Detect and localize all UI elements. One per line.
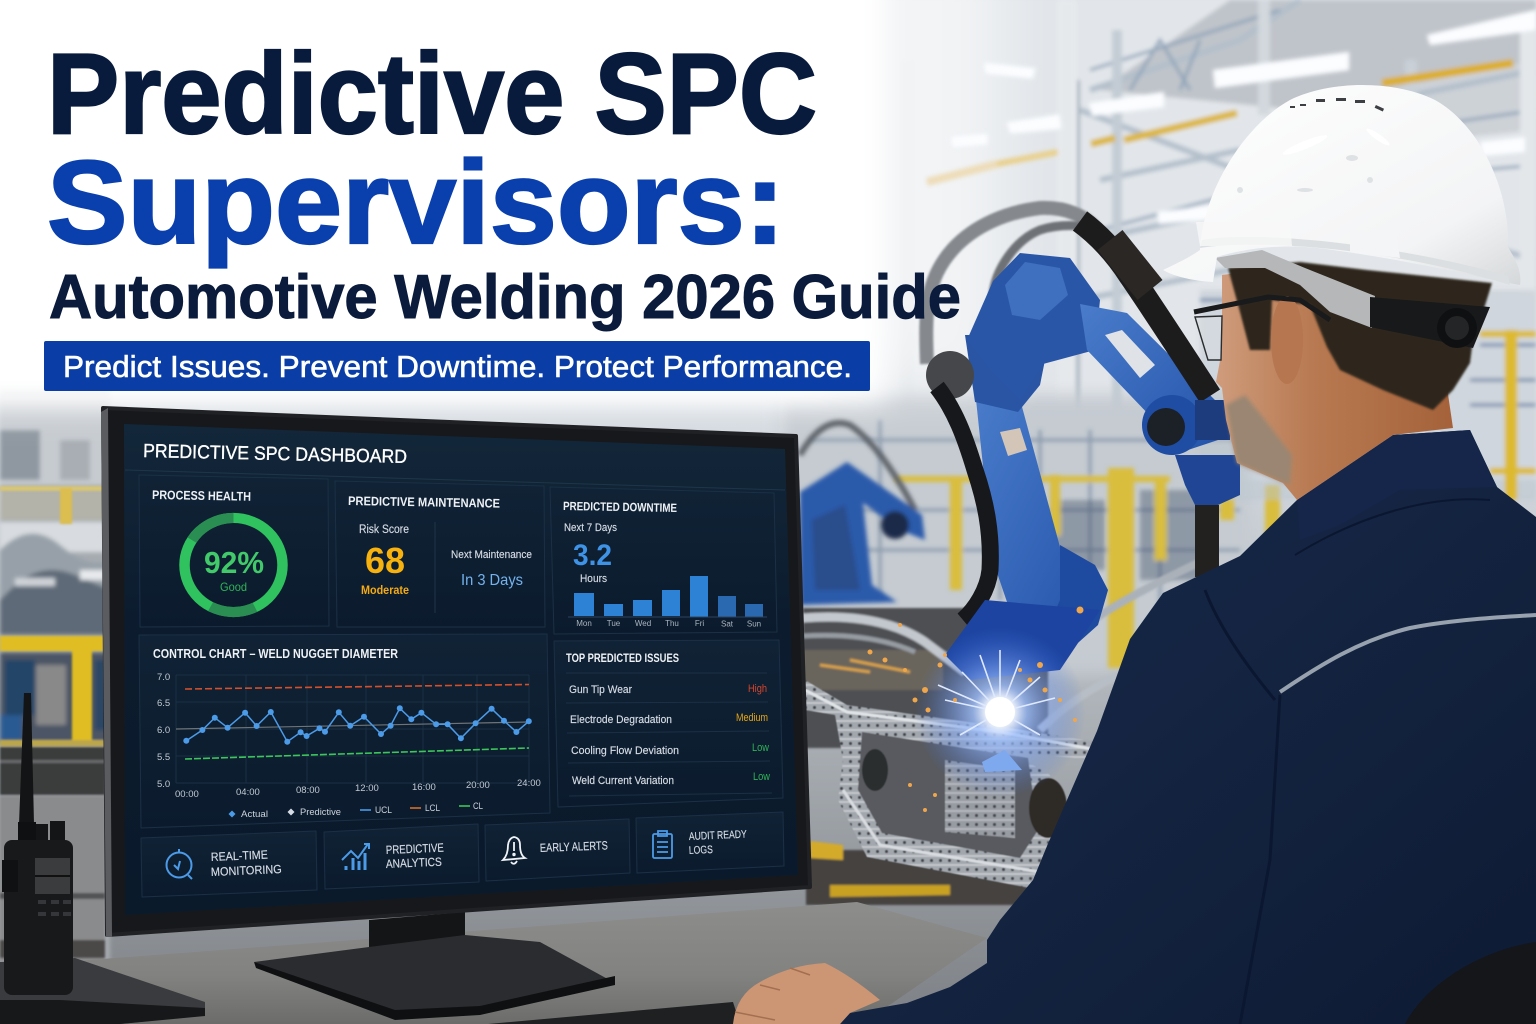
monitor bbox=[101, 408, 810, 937]
next maintenance: In 3 Days bbox=[461, 572, 523, 589]
label bbox=[386, 841, 444, 871]
monitor stand bbox=[254, 912, 615, 1020]
robot motor and elbow bbox=[926, 253, 1100, 412]
x axis labels: 12:00 bbox=[355, 783, 379, 794]
label: ANALYTICS bbox=[386, 855, 442, 871]
donut gauge bbox=[168, 502, 299, 628]
heading: TOP PREDICTED ISSUES bbox=[566, 653, 679, 665]
panel: control chart bbox=[139, 634, 550, 828]
bar chart: Wed bbox=[635, 619, 651, 628]
chart legend: Predictive bbox=[300, 807, 341, 818]
issue: weld current variation: Low bbox=[753, 771, 770, 783]
hair bbox=[1228, 262, 1492, 410]
feature card: real-time monitoring bbox=[141, 831, 317, 897]
label bbox=[689, 829, 748, 857]
heading: PROCESS HEALTH bbox=[152, 488, 251, 504]
panel: process health bbox=[139, 475, 329, 628]
x axis labels: 08:00 bbox=[296, 785, 320, 796]
label: REAL-TIME bbox=[211, 848, 268, 864]
issue: weld current variation bbox=[572, 771, 770, 787]
risk score: Risk Score bbox=[359, 524, 409, 536]
bar chart: Fri bbox=[695, 619, 704, 628]
keyboard bbox=[488, 1002, 740, 1024]
risk score bbox=[359, 524, 409, 597]
x axis labels: 16:00 bbox=[412, 782, 436, 793]
weld spark burst bbox=[868, 606, 1085, 812]
title line 3: Automotive Welding 2026 Guide bbox=[49, 263, 961, 332]
chart legend: UCL bbox=[375, 805, 392, 816]
robot cables bbox=[937, 387, 990, 620]
issue: gun tip wear: Gun Tip Wear bbox=[569, 684, 632, 696]
downtime value: Hours bbox=[580, 573, 607, 585]
feature card: predictive analytics bbox=[324, 824, 479, 889]
panel: predictive maintenance bbox=[335, 481, 545, 627]
bar chart: Thu bbox=[665, 619, 679, 628]
feature card: early alerts bbox=[485, 819, 630, 881]
label: EARLY ALERTS bbox=[540, 838, 608, 855]
panel: top predicted issues bbox=[554, 640, 783, 807]
chart legend: CL bbox=[473, 801, 483, 812]
label: LOGS bbox=[689, 844, 713, 857]
icon: analytics chart bbox=[342, 844, 369, 870]
issue: gun tip wear: High bbox=[748, 683, 767, 695]
robot wrist joint bbox=[1142, 395, 1230, 455]
downtime value: 3.2 bbox=[573, 539, 612, 572]
y axis labels: 7.0 bbox=[157, 672, 170, 683]
desk bbox=[0, 902, 987, 1024]
issue: cooling flow deviation bbox=[571, 742, 769, 757]
heading: PREDICTIVE MAINTENANCE bbox=[348, 494, 500, 511]
y axis labels: 5.5 bbox=[157, 752, 170, 763]
robot lower arm bbox=[975, 390, 1103, 640]
rear strap with knob bbox=[1370, 297, 1490, 348]
screen bbox=[124, 424, 798, 915]
issue: electrode degradation: Electrode Degradation bbox=[570, 714, 672, 726]
heading: CONTROL CHART – WELD NUGGET DIAMETER bbox=[153, 647, 398, 661]
label: MONITORING bbox=[211, 862, 282, 879]
background welding robot bbox=[800, 423, 925, 605]
risk score: 68 bbox=[365, 540, 405, 581]
tagline ribbon bbox=[44, 341, 870, 391]
ear bbox=[1271, 296, 1303, 384]
y axis labels: 5.0 bbox=[157, 779, 170, 790]
chart legend bbox=[228, 801, 483, 820]
x axis labels: 00:00 bbox=[175, 789, 199, 800]
x axis labels bbox=[175, 778, 541, 800]
chart legend: LCL bbox=[425, 803, 440, 814]
risk score: Moderate bbox=[361, 583, 409, 597]
safety glasses bbox=[1194, 297, 1330, 360]
issue: electrode degradation bbox=[570, 712, 768, 726]
downtime value: Next 7 Days bbox=[564, 522, 617, 534]
bar chart: Tue bbox=[607, 619, 621, 628]
issue: cooling flow deviation: Low bbox=[752, 742, 769, 754]
issue: gun tip wear bbox=[569, 683, 767, 696]
next maintenance: Next Maintenance bbox=[451, 549, 532, 561]
robot hose bbox=[926, 208, 1097, 364]
mid-ground fencing and columns bbox=[780, 395, 1250, 675]
weld gun bbox=[1175, 455, 1240, 577]
tagline ribbon: Predict Issues. Prevent Downtime. Protect Performance. bbox=[63, 349, 852, 384]
chart legend: Actual bbox=[241, 809, 268, 820]
panel: predicted downtime bbox=[550, 487, 777, 634]
dashboard title: PREDICTIVE SPC DASHBOARD bbox=[143, 441, 407, 468]
supervisor figure bbox=[733, 85, 1536, 1024]
x axis labels: 20:00 bbox=[466, 780, 490, 791]
hand on keyboard bbox=[733, 963, 880, 1024]
left factory area bbox=[0, 380, 110, 970]
y axis labels: 6.5 bbox=[157, 698, 170, 709]
issue: weld current variation: Weld Current Variation bbox=[572, 775, 674, 787]
label: PREDICTIVE bbox=[386, 841, 444, 857]
x axis labels: 24:00 bbox=[517, 778, 541, 789]
x axis labels: 04:00 bbox=[236, 787, 260, 798]
notebook bbox=[0, 958, 205, 1024]
label bbox=[211, 848, 282, 879]
neck and face bbox=[1216, 265, 1453, 500]
title line 2: Supervisors: bbox=[47, 137, 785, 269]
walkie-talkie radio bbox=[2, 693, 73, 995]
downtime value bbox=[564, 522, 617, 585]
bar chart: Sat bbox=[721, 620, 734, 628]
ceiling steel and lights bbox=[780, 0, 1536, 480]
feature card: audit ready logs bbox=[636, 812, 784, 873]
jacket bbox=[840, 430, 1536, 1024]
y axis labels: 6.0 bbox=[157, 725, 170, 736]
heading: PREDICTED DOWNTIME bbox=[563, 499, 677, 515]
issue: cooling flow deviation: Cooling Flow Deviation bbox=[571, 745, 679, 757]
chair back bbox=[1405, 942, 1536, 1024]
next maintenance bbox=[451, 549, 532, 589]
suspension band bbox=[1215, 250, 1375, 328]
icon: bell bbox=[503, 837, 525, 864]
label: AUDIT READY bbox=[689, 829, 748, 843]
main frame bbox=[805, 680, 1097, 890]
bar chart bbox=[568, 576, 767, 628]
robot forearm bbox=[1080, 304, 1227, 455]
monitor bezel bbox=[103, 408, 810, 935]
gauge value: 92% bbox=[204, 545, 264, 580]
hard hat bbox=[1163, 85, 1520, 285]
y axis labels bbox=[157, 672, 170, 790]
issue: electrode degradation: Medium bbox=[736, 712, 768, 724]
title block bbox=[44, 31, 961, 391]
title line 1: Predictive SPC bbox=[47, 31, 817, 158]
actual series bbox=[186, 708, 529, 742]
gauge status: Good bbox=[220, 580, 247, 594]
faded ceiling details near the fade bbox=[927, 0, 1076, 300]
bar chart: Mon bbox=[576, 619, 592, 628]
icon: clock bbox=[166, 849, 192, 879]
bar chart: Sun bbox=[747, 620, 761, 628]
line chart bbox=[157, 672, 541, 800]
car body frame and welding sparks bbox=[803, 562, 1200, 905]
icon: clipboard bbox=[653, 831, 672, 858]
rear car body bbox=[803, 562, 1200, 905]
beard stubble bbox=[1226, 395, 1292, 485]
soft white fade behind title bbox=[0, 0, 1000, 390]
main welding robot arm bbox=[926, 208, 1240, 680]
